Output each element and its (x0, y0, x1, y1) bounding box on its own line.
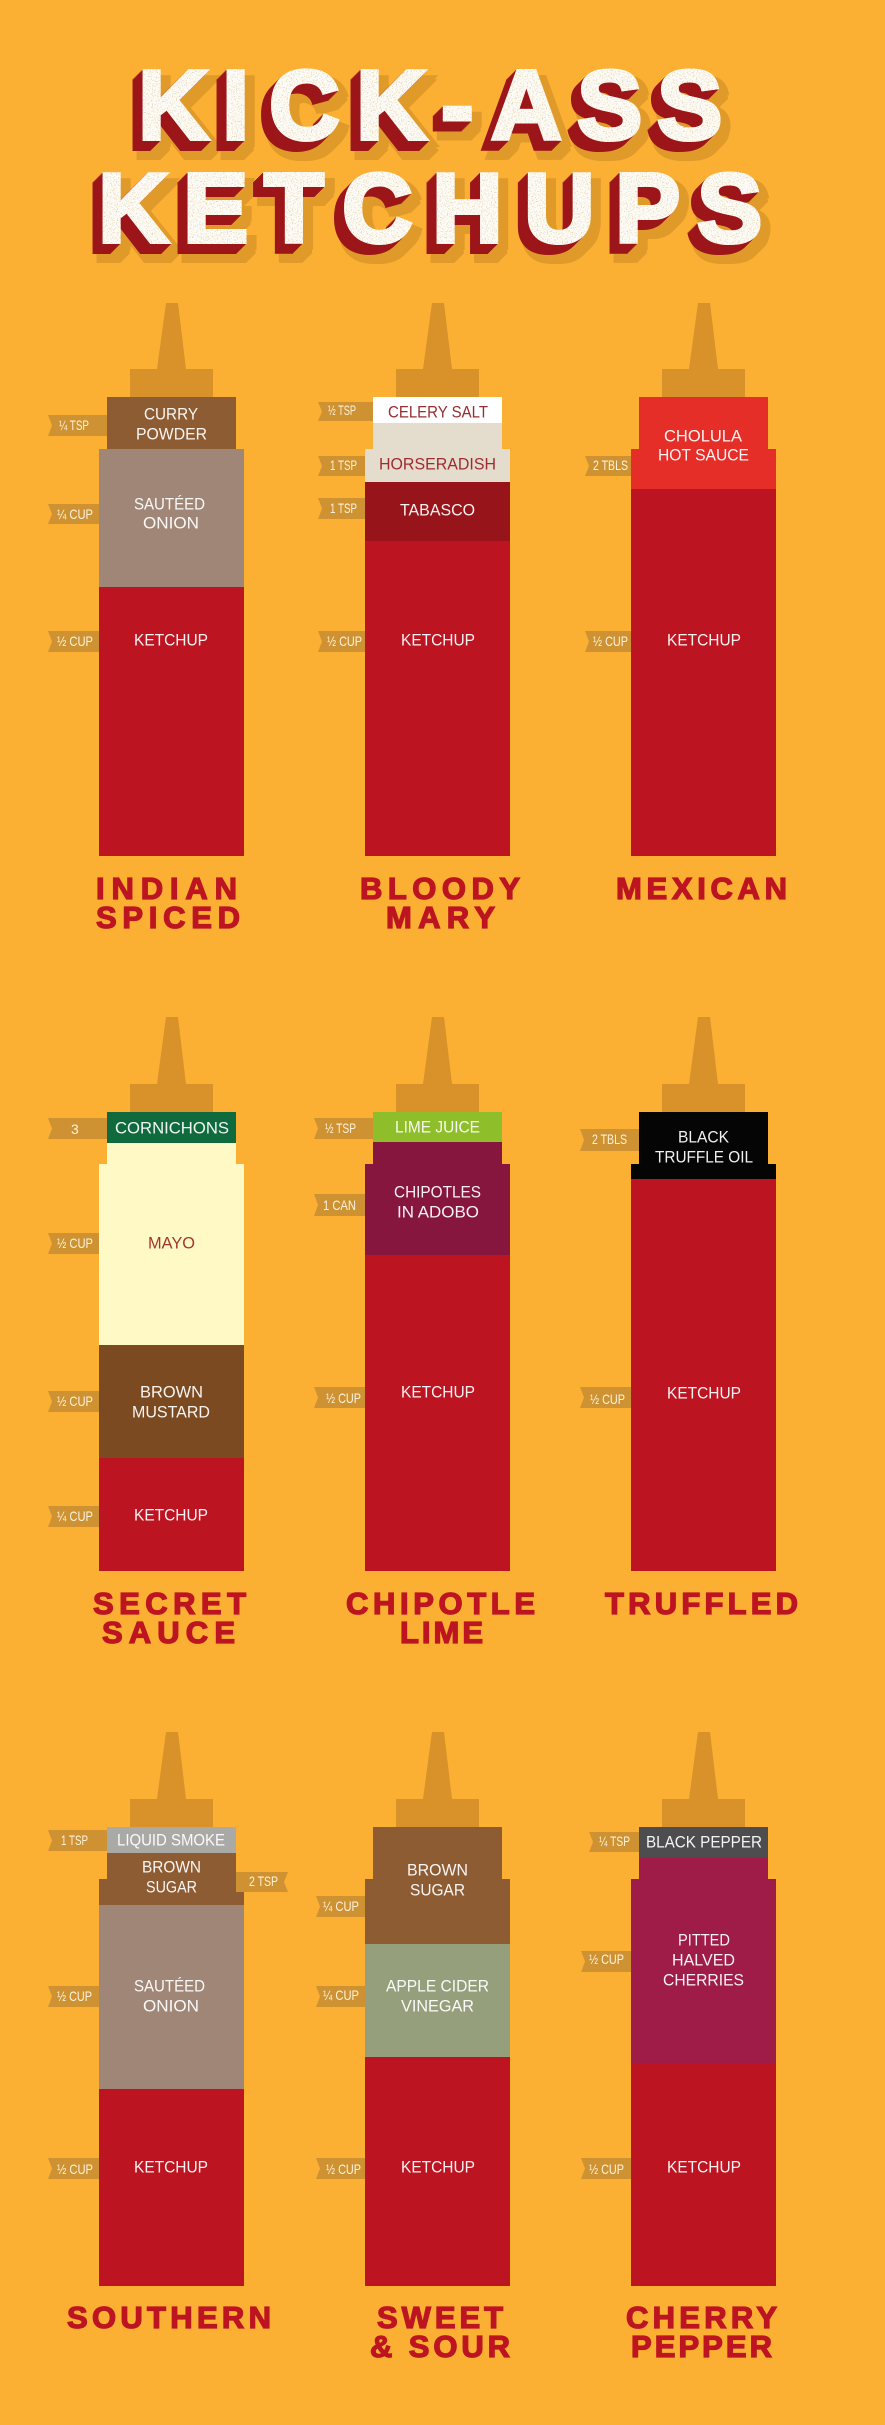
bottle cap (130, 1017, 213, 1112)
amount: ketchup: ½ CUP (326, 2161, 361, 2177)
amount: cholula (585, 456, 631, 476)
bottle cap (662, 1732, 745, 1827)
layer: cornichons: CORNICHONS (115, 1118, 229, 1138)
bottle cap (130, 1732, 213, 1827)
amount: black pepper (589, 1832, 639, 1852)
layer: sauteed onion: SAUTÉED (134, 1976, 205, 1996)
layer: apple cider vinegar: VINEGAR (401, 1996, 474, 2016)
amount: cornichons (48, 1118, 107, 1139)
layer: ketchup (99, 587, 244, 856)
layer: apple cider vinegar: APPLE CIDER (386, 1976, 489, 1996)
amount: apple cider vinegar (316, 1986, 365, 2007)
amount: ketchup (318, 631, 365, 652)
layer: ketchup (365, 2057, 510, 2286)
layer: pitted halved cherries: PITTED (678, 1930, 730, 1950)
amount: sauteed onion: ½ CUP (57, 1988, 92, 2004)
recipe name: INDIAN (96, 871, 237, 906)
layer: cholula hot sauce (631, 397, 776, 489)
amount: brown mustard (48, 1391, 99, 1412)
title: KETCHUPS (98, 153, 762, 263)
layer: ketchup (365, 541, 510, 856)
layer: ketchup (631, 2064, 776, 2286)
layer: ketchup: KETCHUP (401, 1382, 475, 1402)
layer: mayo: MAYO (148, 1234, 195, 1252)
amount: chipotles (314, 1194, 365, 1216)
recipe name: MARY (386, 900, 495, 935)
recipe name: SECRET (93, 1586, 246, 1621)
amount: sauteed onion (48, 504, 99, 524)
amount: curry powder (48, 415, 107, 436)
layer: brown sugar: BROWN (142, 1858, 201, 1876)
layer: horseradish (365, 423, 510, 482)
layer: black truffle oil: TRUFFLE OIL (655, 1148, 753, 1166)
amount: truffle oil: 2 TBLS (592, 1131, 627, 1147)
recipe name: TRUFFLED (605, 1586, 798, 1621)
title (98, 50, 762, 263)
recipe name: CHIPOTLE (346, 1586, 535, 1621)
layer: brown sugar: BROWN (407, 1860, 468, 1880)
layer: ketchup: KETCHUP (667, 2158, 741, 2176)
layer: liquid smoke (107, 1827, 236, 1853)
recipe name (370, 2300, 510, 2364)
layer: curry powder: POWDER (136, 424, 207, 444)
layer: liquid smoke: LIQUID SMOKE (117, 1830, 225, 1850)
amount: mayo (48, 1233, 99, 1254)
amount: ketchup (48, 1506, 99, 1527)
layer: sauteed onion: ONION (143, 514, 199, 532)
layer: ketchup (631, 489, 776, 856)
layer: black pepper (639, 1827, 768, 1858)
bottle cap (396, 1017, 479, 1112)
amount: ketchup (585, 631, 631, 652)
bottle cap (662, 303, 745, 397)
panel: Southern (48, 1732, 288, 2335)
amount: cherries (581, 1951, 631, 1972)
amount: ketchup: ½ CUP (57, 2161, 93, 2177)
panel: Indian Spiced (48, 303, 255, 935)
amount: ketchup: ½ CUP (57, 633, 93, 649)
recipe name: BLOODY (360, 871, 520, 906)
amount: ketchup: ½ CUP (590, 1391, 625, 1407)
recipe name: & SOUR (370, 2329, 510, 2364)
layer: cholula hot sauce: CHOLULA (664, 426, 743, 446)
amount: lime juice (314, 1118, 373, 1139)
recipe name: SOUTHERN (67, 2300, 271, 2335)
recipe name: SPICED (96, 900, 240, 935)
recipe name: MEXICAN (616, 871, 787, 906)
panel: Sweet & Sour (316, 1732, 520, 2364)
layer: brown sugar: SUGAR (146, 1878, 197, 1896)
bottle cap (396, 1732, 479, 1827)
layer: ketchup: KETCHUP (401, 630, 475, 650)
bottle cap (396, 303, 479, 397)
layer: lime juice: LIME JUICE (395, 1118, 480, 1136)
layer: brown sugar (365, 1827, 510, 1944)
layer: ketchup (631, 1179, 776, 1571)
amount: ketchup: ½ CUP (326, 1390, 361, 1406)
layer: brown sugar: SUGAR (410, 1880, 465, 1900)
recipe name (360, 871, 520, 935)
panel: Truffled (580, 1017, 798, 1621)
amount: cornichons: 3 (71, 1121, 79, 1137)
amount: ketchup (48, 631, 99, 652)
amount: ketchup: ¼ CUP (57, 1508, 93, 1524)
layer: chipotles in adobo (365, 1142, 510, 1255)
layer: ketchup: KETCHUP (134, 1506, 208, 1524)
amount: ketchup (316, 2158, 365, 2179)
recipe name: SAUCE (102, 1615, 235, 1650)
panel: Bloody Mary (318, 303, 520, 935)
amount: celery salt: ½ TSP (328, 402, 356, 418)
amount: lime juice: ½ TSP (325, 1120, 356, 1136)
recipe name (96, 871, 240, 935)
recipe name: CHERRY (626, 2300, 777, 2335)
layer: brown mustard: MUSTARD (132, 1402, 210, 1422)
layer: brown sugar (99, 1853, 244, 1905)
panel: Secret Sauce (48, 1017, 255, 1650)
layer: ketchup: KETCHUP (401, 2158, 475, 2176)
layer: celery salt (373, 397, 502, 423)
panel: Cherry Pepper (581, 1732, 785, 2364)
layer: brown mustard: BROWN (140, 1382, 203, 1402)
layer: curry powder: CURRY (144, 404, 198, 424)
amount: ketchup (580, 1387, 631, 1408)
amount: ketchup (314, 1387, 365, 1408)
layer: sauteed onion (99, 1905, 244, 2089)
amount: curry powder: ¼ TSP (59, 417, 89, 433)
title: KICK-ASS (138, 50, 722, 160)
amount: ketchup: ½ CUP (589, 2161, 624, 2177)
layer: chipotles in adobo: CHIPOTLES (394, 1182, 481, 1202)
layer: black pepper: BLACK PEPPER (646, 1832, 762, 1852)
recipe name: PEPPER (631, 2329, 772, 2364)
layer: tabasco: TABASCO (400, 500, 475, 520)
layer: ketchup: KETCHUP (134, 630, 208, 650)
layer: ketchup: KETCHUP (667, 1384, 741, 1402)
recipe name (346, 1586, 535, 1650)
amount: cholula: 2 TBLS (593, 457, 628, 473)
layer: pitted halved cherries: HALVED (672, 1950, 735, 1970)
amount: cherries: ½ CUP (589, 1951, 624, 1967)
recipe name (93, 1586, 246, 1650)
panel: Chipotle Lime (314, 1017, 535, 1650)
amount: sauteed onion: ¼ CUP (57, 506, 93, 522)
layer: ketchup: KETCHUP (667, 630, 741, 650)
amount: tabasco: 1 TSP (330, 500, 357, 516)
panel: Mexican (585, 303, 787, 906)
layer: black truffle oil: BLACK (678, 1128, 730, 1146)
layer: cholula hot sauce: HOT SAUCE (658, 446, 749, 464)
layer: ketchup (99, 2089, 244, 2286)
amount: brown sugar (236, 1872, 288, 1892)
layer: pitted halved cherries: CHERRIES (663, 1970, 744, 1990)
layer: brown mustard (99, 1345, 244, 1458)
layer: ketchup (365, 1255, 510, 1571)
layer: sauteed onion (99, 449, 244, 587)
amount: ketchup (48, 2158, 99, 2179)
amount: truffle oil (580, 1129, 639, 1151)
amount: horseradish: 1 TSP (330, 457, 357, 473)
layer: ketchup: KETCHUP (134, 2158, 208, 2176)
layer: tabasco (365, 482, 510, 541)
amount: celery salt (318, 402, 373, 421)
infographic canvas (48, 68, 798, 2358)
amount: liquid smoke: 1 TSP (61, 1832, 88, 1848)
layer: chipotles in adobo: IN ADOBO (397, 1202, 479, 1222)
amount: liquid smoke (48, 1830, 107, 1851)
bottle cap (130, 303, 213, 397)
layer: horseradish: HORSERADISH (379, 454, 496, 474)
layer: apple cider vinegar (365, 1944, 510, 2057)
amount: horseradish (318, 456, 365, 476)
layer: sauteed onion: ONION (143, 1996, 199, 2016)
layer: celery salt: CELERY SALT (388, 402, 488, 422)
recipe name: SWEET (377, 2300, 503, 2335)
amount: sauteed onion (48, 1986, 99, 2007)
recipe name: LIME (400, 1615, 483, 1650)
amount: chipotles: 1 CAN (323, 1197, 356, 1213)
layer: cornichons (107, 1112, 236, 1143)
layer: curry powder (107, 397, 236, 449)
amount: brown sugar (316, 1896, 365, 1917)
amount: brown sugar: ¼ CUP (323, 1898, 359, 1914)
layer: pitted halved cherries (631, 1858, 776, 2064)
amount: black pepper: ¼ TSP (599, 1833, 630, 1849)
amount: ketchup (581, 2158, 631, 2179)
layer: black truffle oil (631, 1112, 776, 1179)
amount: brown sugar: 2 TSP (249, 1873, 278, 1889)
layer: mayo (99, 1143, 244, 1345)
layer: lime juice (373, 1112, 502, 1142)
bottle cap (662, 1017, 745, 1112)
amount: apple cider vinegar: ¼ CUP (323, 1987, 359, 2003)
amount: ketchup: ½ CUP (593, 633, 628, 649)
amount: ketchup: ½ CUP (327, 633, 362, 649)
recipe name (626, 2300, 777, 2364)
amount: tabasco (318, 498, 365, 519)
layer: sauteed onion: SAUTÉED (134, 494, 205, 514)
layer: ketchup (99, 1458, 244, 1571)
amount: mayo: ½ CUP (57, 1235, 93, 1251)
amount: brown mustard: ½ CUP (57, 1393, 93, 1409)
